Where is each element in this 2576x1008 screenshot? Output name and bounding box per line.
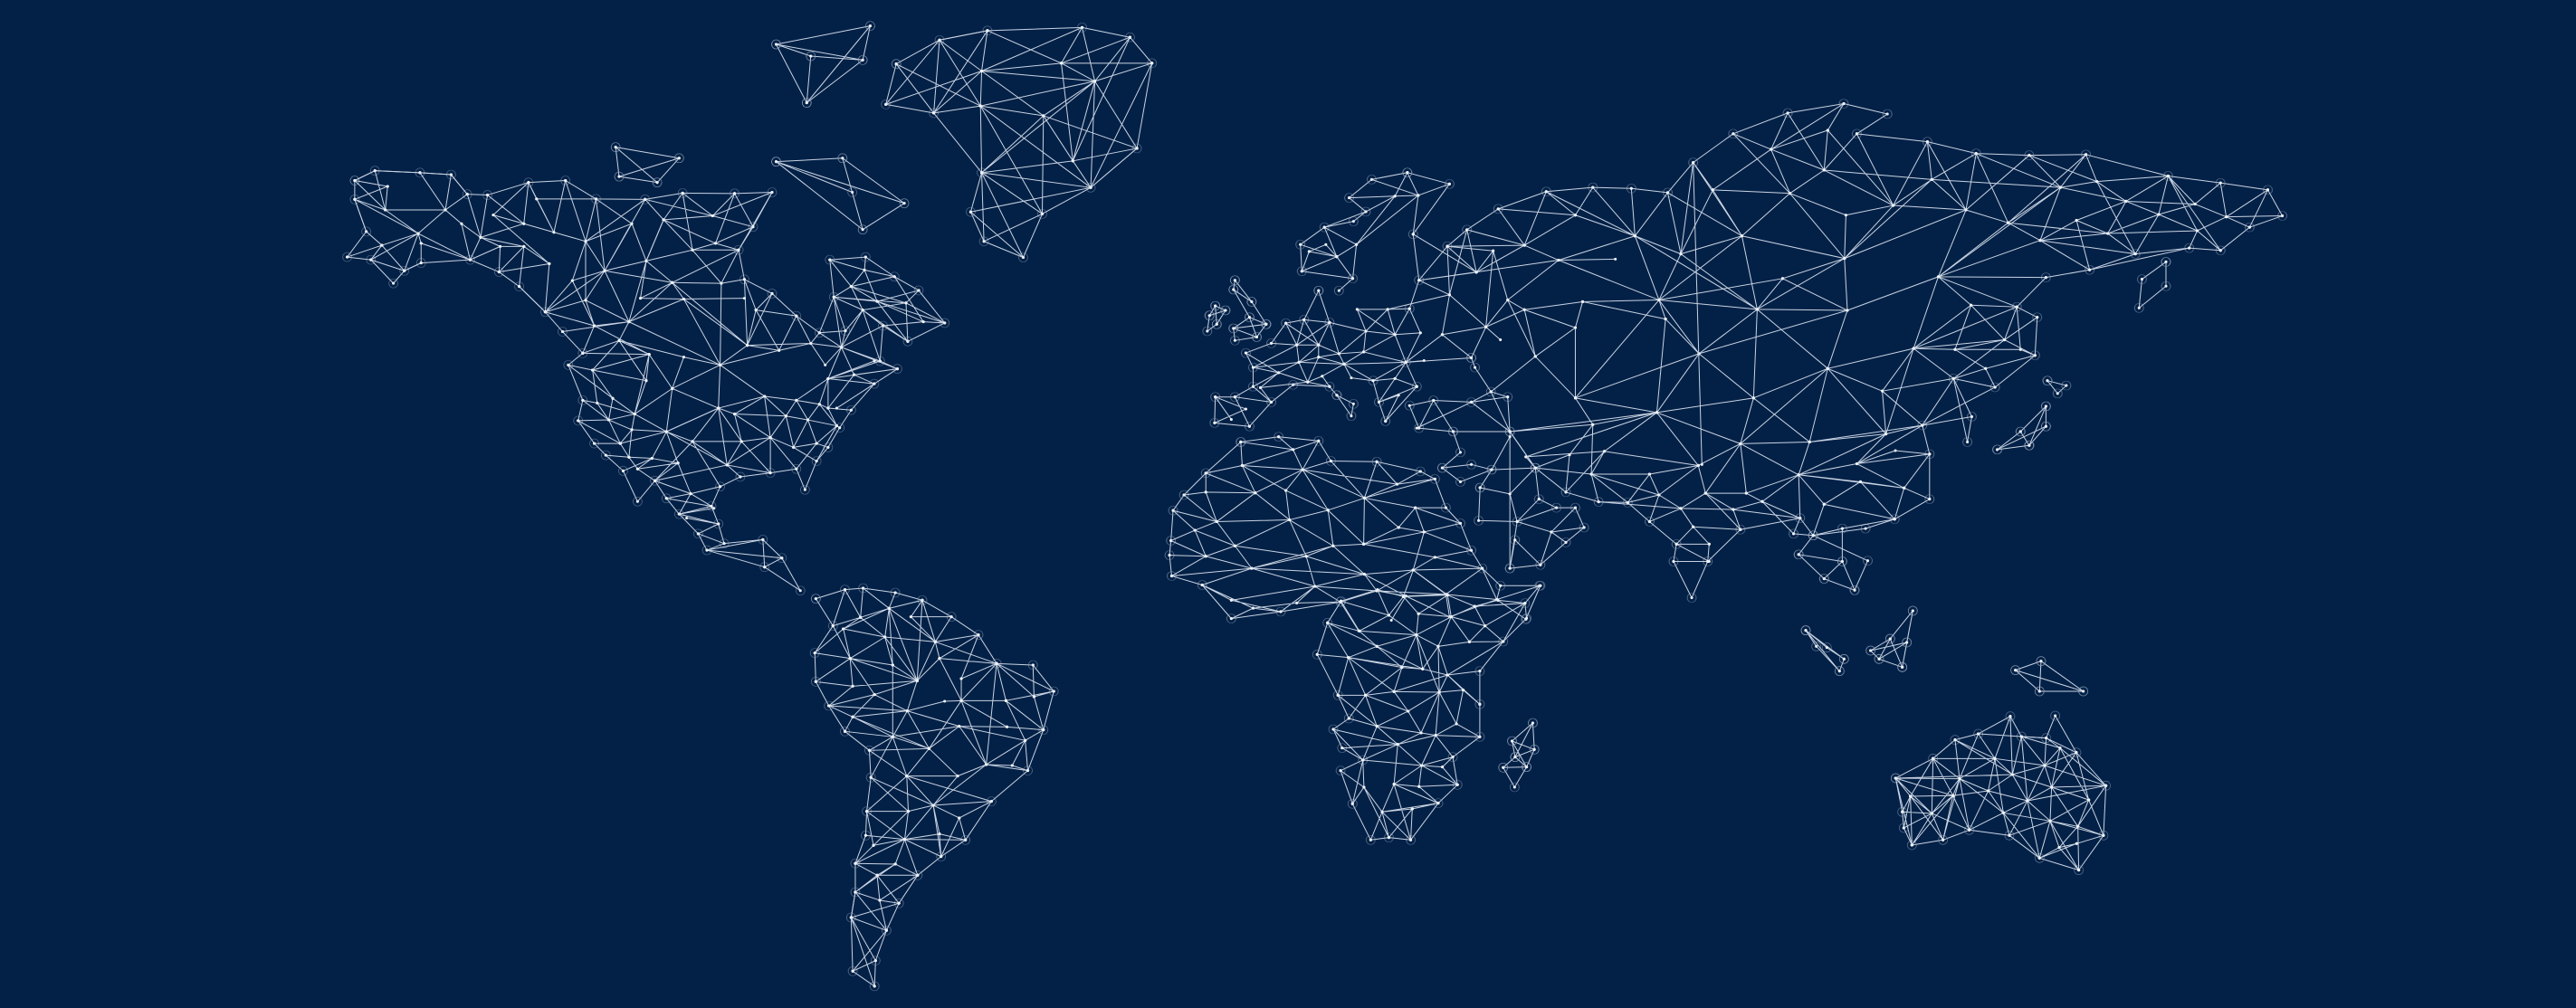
northern Africa mesh [1169, 437, 1541, 631]
map: South America network [815, 588, 1054, 986]
map: Greenland network [886, 27, 1152, 258]
map: Europe network [1207, 173, 1472, 426]
map: Japan and Sakhalin islands network [1998, 262, 2166, 450]
map: Madagascar network [1503, 723, 1534, 787]
Scandinavia mesh [1301, 173, 1449, 290]
map: Asia network [1388, 104, 2283, 598]
map: North America network [348, 171, 945, 591]
map: Africa network [1169, 437, 1541, 840]
map: Arctic islands network [615, 26, 904, 230]
map: Australia network [1895, 716, 2106, 870]
map: Southeast Asian islands network [1806, 611, 1913, 671]
map: New Guinea network [2016, 661, 2084, 691]
southern Africa mesh [1317, 570, 1540, 840]
